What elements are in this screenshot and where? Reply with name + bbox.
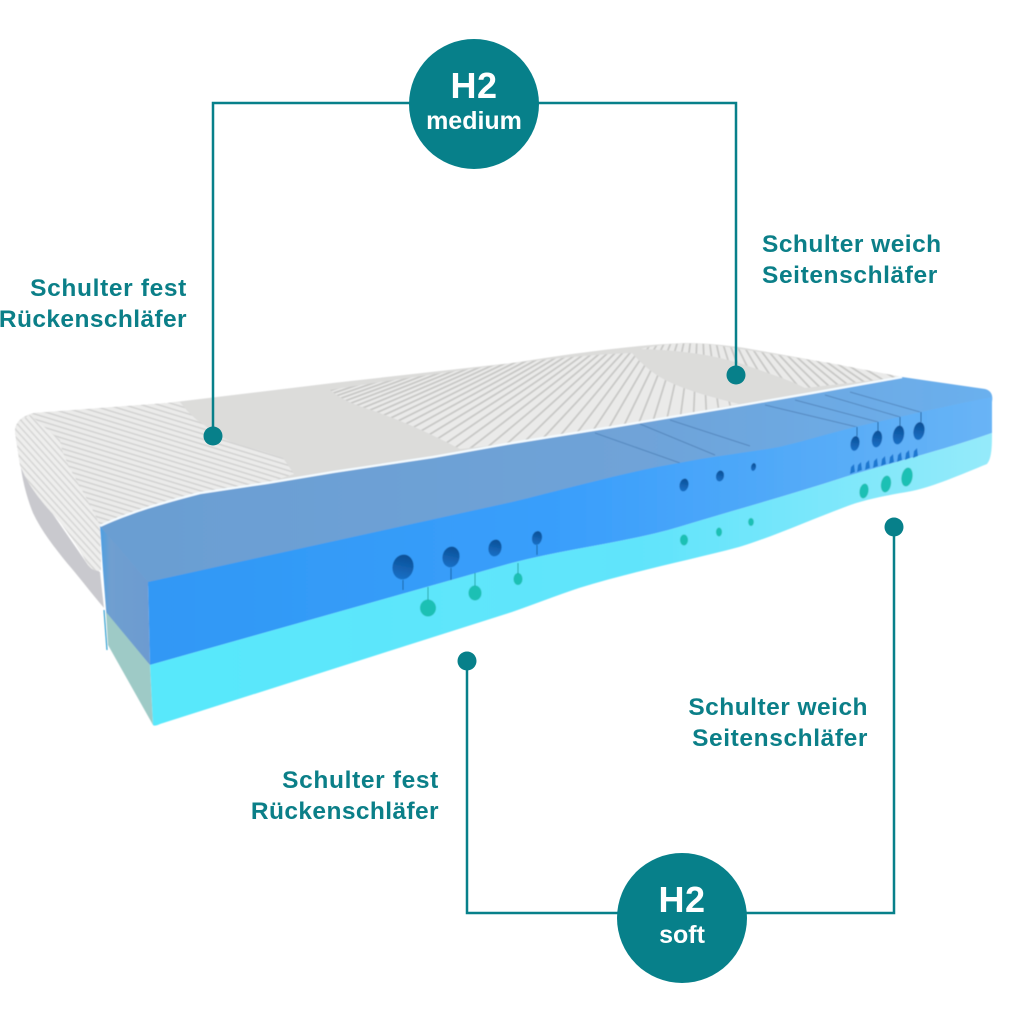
- connector: top left: [204, 103, 420, 446]
- holes upper layer: [390, 421, 926, 581]
- label: bottom left: [251, 767, 439, 825]
- mattress illustration: [14, 342, 993, 726]
- foam blue left face: [100, 526, 150, 665]
- connector: bottom right: [735, 518, 904, 913]
- cut lines on foam: [595, 392, 920, 463]
- small slots: [850, 448, 918, 474]
- grey side of cover: [20, 460, 108, 645]
- right quilted patches: [331, 344, 894, 449]
- connector: bottom left: [458, 652, 630, 913]
- badge: H2 soft: H2: [658, 879, 706, 920]
- seam at left corner: [104, 610, 107, 650]
- label: top left: Rückenschläfer: [0, 306, 187, 333]
- label: bottom right: Schulter weich: [688, 694, 868, 721]
- foam blue front face: [148, 397, 992, 665]
- connector: top right: [530, 103, 746, 384]
- left quilted patch: [15, 402, 294, 571]
- label: top left: Schulter fest: [30, 275, 187, 302]
- foam top face: [100, 377, 992, 586]
- label: top right: Schulter weich: [762, 231, 942, 258]
- badge: H2 soft: soft: [659, 921, 705, 949]
- white cover edge: [100, 377, 902, 526]
- thin slits: [403, 412, 921, 590]
- label: bottom left: Rückenschläfer: [251, 798, 439, 825]
- badge: H2 medium: medium: [426, 107, 522, 135]
- label: bottom right: Seitenschläfer: [692, 725, 868, 752]
- left edge quilting: [15, 415, 101, 571]
- foam cyan left face: [106, 612, 153, 725]
- label: bottom left: Schulter fest: [282, 767, 439, 794]
- label: bottom right: [688, 694, 868, 752]
- foam cyan front face: [150, 433, 992, 726]
- label: top right: [762, 231, 942, 289]
- badge: H2 medium: H2: [450, 65, 498, 106]
- label: top left: [0, 275, 187, 333]
- top surface of cover: [15, 343, 902, 571]
- label: top right: Seitenschläfer: [762, 262, 938, 289]
- holes lower layer: [420, 467, 914, 616]
- badge: H2 soft: [617, 853, 747, 983]
- badge: H2 medium: [409, 39, 539, 169]
